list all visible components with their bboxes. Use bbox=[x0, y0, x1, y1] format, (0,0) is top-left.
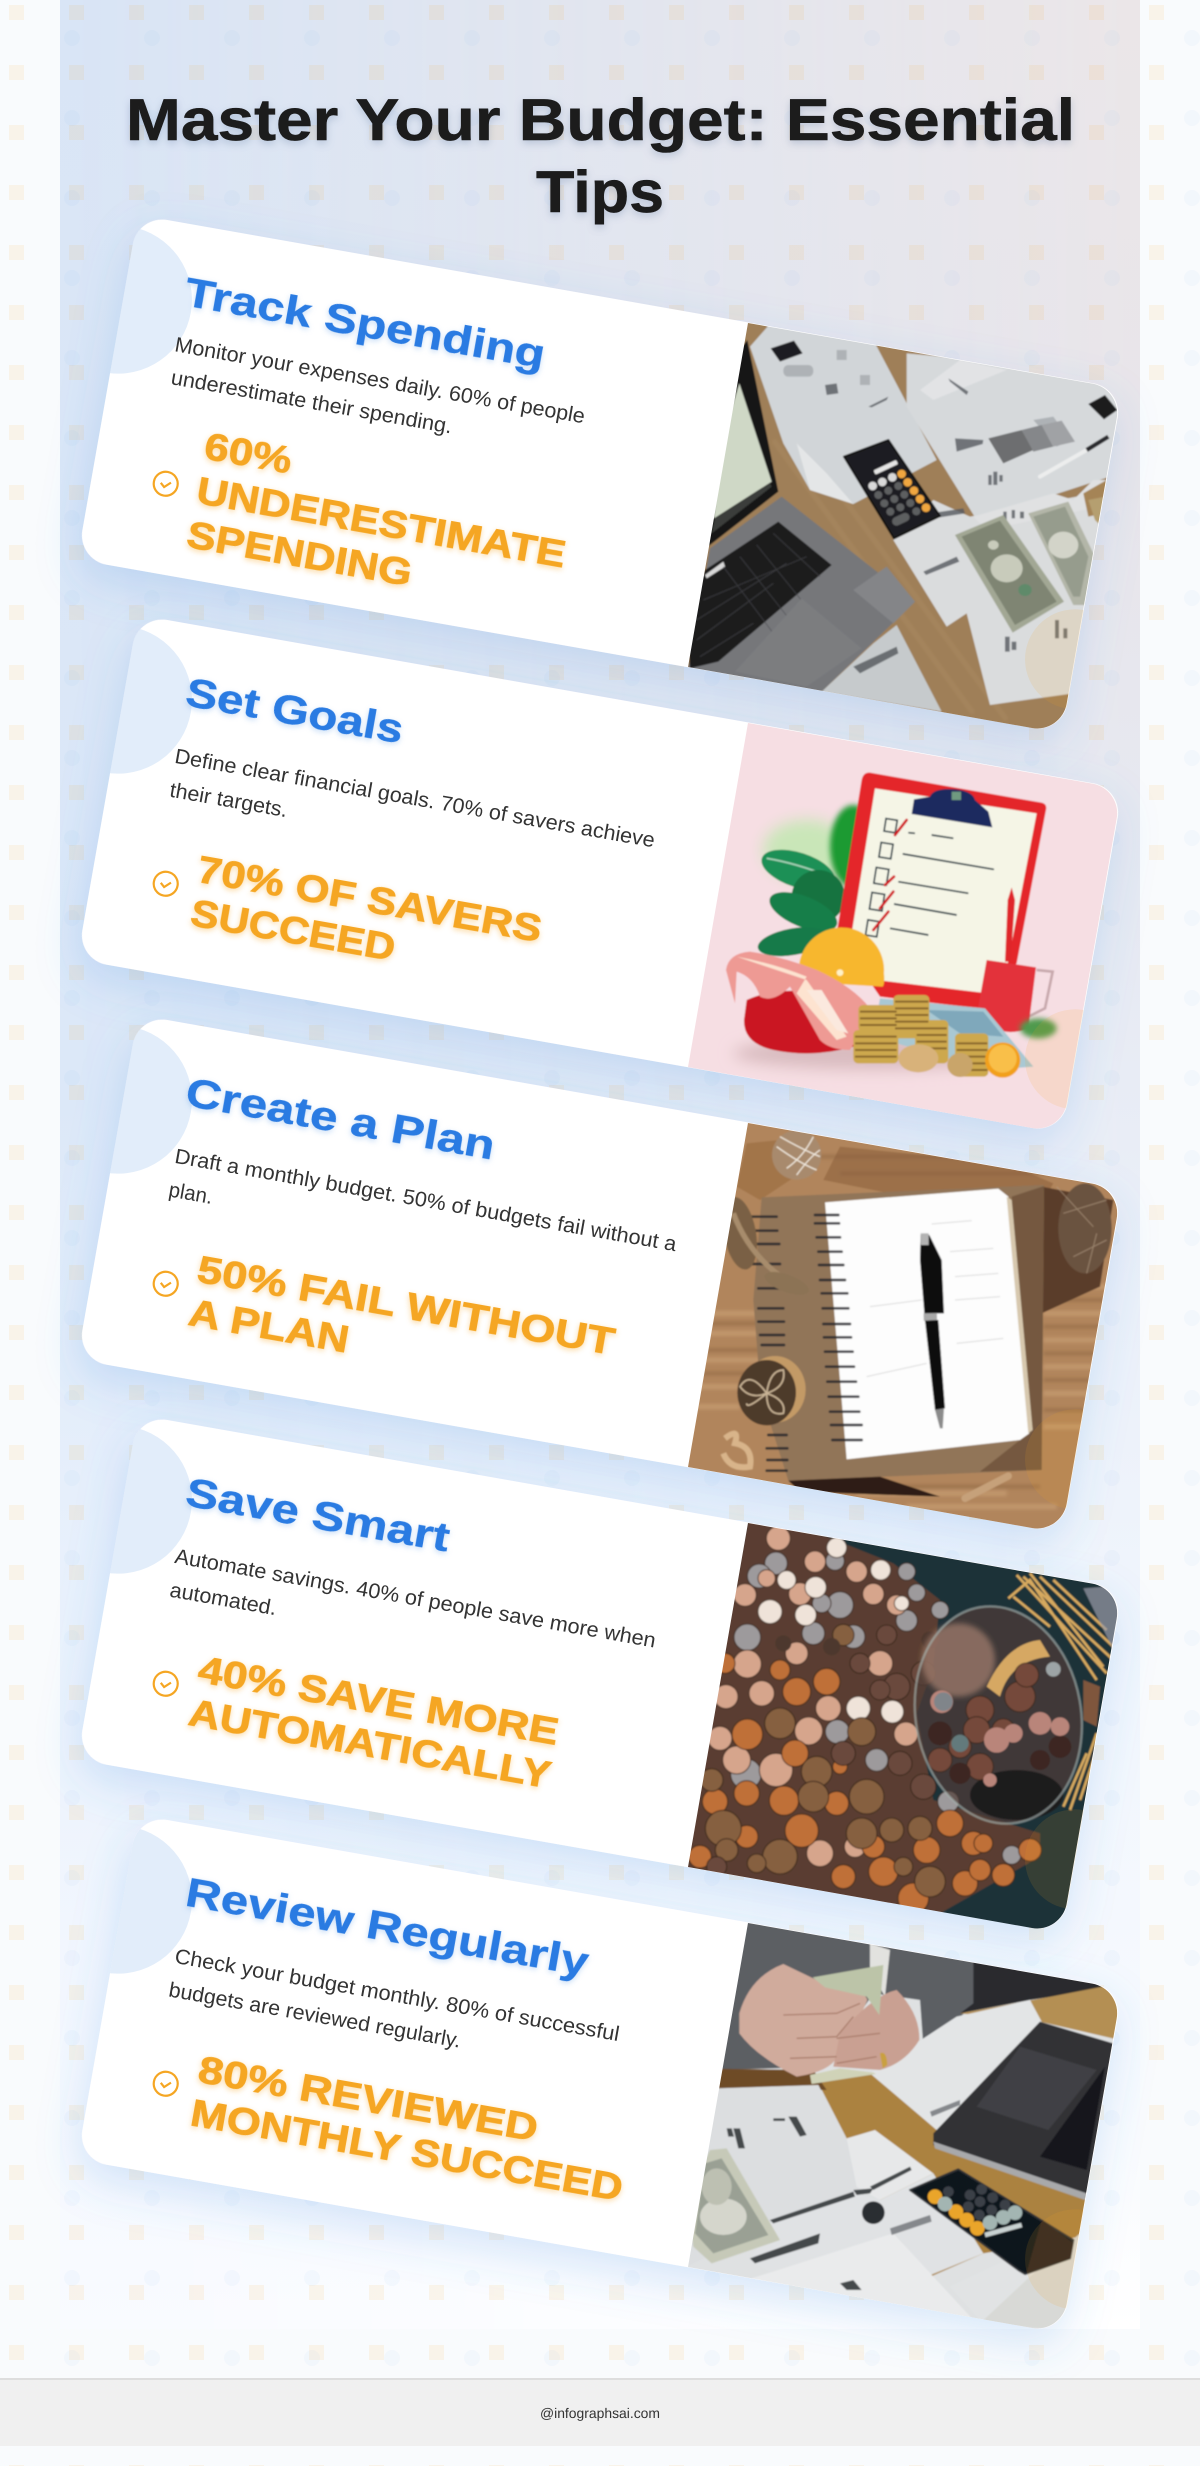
orange slice bbox=[799, 927, 884, 987]
panel: review regularly bbox=[4, 1814, 1170, 2347]
card content: set goals bbox=[4, 614, 1170, 1117]
description bbox=[167, 1945, 621, 2080]
title: Tips bbox=[536, 159, 664, 225]
photo: laptop, calculator and cash on desk bbox=[688, 323, 1117, 728]
bars and marks bbox=[727, 2100, 960, 2290]
heading: Review Regularly bbox=[182, 1869, 593, 1985]
pen bbox=[920, 1235, 944, 1313]
description: Automate savings. 40% of people save more when bbox=[173, 1545, 658, 1652]
pencil bbox=[1005, 887, 1015, 962]
footer bar bbox=[0, 2378, 1200, 2446]
jar glass bbox=[898, 1593, 1099, 1837]
footer credit: @infographsai.com bbox=[540, 2405, 660, 2421]
cash in hand bbox=[813, 1965, 883, 2015]
description: Check your budget monthly. 80% of successful bbox=[173, 1945, 621, 2046]
description: automated. bbox=[168, 1579, 278, 1620]
photo: clipboard checklist, coins and citrus bbox=[688, 723, 1117, 1128]
panel: create a plan bbox=[4, 1014, 1170, 1547]
ribbon bbox=[726, 952, 870, 1050]
pencil stub bbox=[965, 1476, 1008, 1498]
page bbox=[825, 1189, 1029, 1459]
icon: check bbox=[152, 2070, 180, 2098]
red mug bbox=[1028, 970, 1053, 1017]
sweater and dark background bbox=[720, 1917, 977, 2070]
binder clips bbox=[771, 341, 803, 362]
jar coins bbox=[928, 1663, 1039, 1780]
cash stack bbox=[687, 2148, 780, 2263]
card body bbox=[77, 1815, 1123, 2333]
description: budgets are reviewed regularly. bbox=[167, 1979, 463, 2053]
wood areas bbox=[817, 2073, 1087, 2278]
icon: check bbox=[152, 1670, 180, 1698]
description: plan. bbox=[167, 1179, 214, 1209]
card content: create a plan bbox=[4, 1014, 1170, 1517]
pen bbox=[1040, 450, 1087, 477]
coins: brown bbox=[700, 1624, 945, 1897]
description: Draft a monthly budget. 50% of budgets fail without a bbox=[173, 1145, 679, 1256]
panel: set goals bbox=[4, 614, 1170, 1147]
spirals bbox=[749, 1215, 862, 1471]
spaghetti bbox=[1008, 1573, 1113, 1810]
cash stacks bbox=[1028, 502, 1095, 605]
coins: silver bbox=[731, 1552, 1021, 1864]
clipboard bbox=[837, 773, 1046, 1008]
stat: SUCCEED bbox=[187, 892, 399, 970]
laptop bbox=[933, 2022, 1113, 2198]
stat bbox=[185, 1249, 618, 1407]
phone bbox=[910, 2169, 1073, 2274]
phone bbox=[844, 440, 940, 538]
card body bbox=[77, 615, 1123, 1133]
photo: hands counting cash over papers bbox=[673, 1913, 1140, 2347]
photo: spiral notebook and pen on wood bbox=[673, 1113, 1140, 1547]
decorative circles bbox=[4, 1814, 1170, 2317]
coins: pink copper bbox=[708, 1526, 918, 1867]
description: underestimate their spending. bbox=[169, 366, 454, 438]
cash bbox=[873, 998, 1033, 1070]
decorative circles bbox=[110, 229, 1084, 708]
description: Define clear financial goals. 70% of savers achieve bbox=[173, 745, 657, 852]
stat: MONTHLY SUCCEED bbox=[187, 2092, 626, 2210]
stat: UNDERESTIMATE bbox=[193, 470, 569, 576]
jar interior bbox=[898, 1593, 1099, 1837]
description: Monitor your expenses daily. 60% of people bbox=[173, 333, 587, 428]
stat: SPENDING bbox=[184, 514, 415, 595]
stat bbox=[184, 425, 577, 621]
yarn ball bbox=[772, 1130, 821, 1180]
stat: A PLAN bbox=[185, 1292, 352, 1362]
title bbox=[126, 87, 1075, 225]
laptop bbox=[709, 340, 779, 547]
leaves bbox=[760, 848, 835, 888]
stat: 40% SAVE MORE bbox=[195, 1649, 562, 1754]
papers bbox=[870, 2000, 1042, 2130]
small chart marks bbox=[825, 378, 1067, 652]
icon: check bbox=[152, 870, 180, 898]
panel: track spending bbox=[3, 214, 1170, 747]
wood strip under sleeve bbox=[683, 2068, 827, 2090]
icon: check bbox=[152, 1270, 180, 1298]
heading: Save Smart bbox=[182, 1469, 453, 1560]
title: Master Your Budget: Essential bbox=[126, 87, 1075, 153]
photo: coins spilling from a jar bbox=[673, 1513, 1140, 1947]
panel: save smart bbox=[4, 1414, 1170, 1947]
card body bbox=[77, 1015, 1123, 1533]
decorative circles bbox=[4, 1414, 1170, 1917]
card content: save smart bbox=[4, 1414, 1170, 1917]
card content: review regularly bbox=[4, 1814, 1170, 2317]
plant sprig bbox=[1058, 1183, 1112, 1273]
heading: Set Goals bbox=[182, 669, 407, 752]
small orange bbox=[985, 1042, 1020, 1078]
card body bbox=[77, 215, 1123, 733]
stat: AUTOMATICALLY bbox=[185, 1692, 554, 1797]
treemap bbox=[988, 430, 1033, 463]
stat: 70% OF SAVERS bbox=[194, 849, 545, 951]
coins: dark shaded bbox=[707, 1625, 936, 1877]
curled shaving bbox=[723, 1434, 751, 1467]
coins: off-white bbox=[758, 1538, 909, 1723]
decorative circles bbox=[4, 614, 1170, 1117]
card body bbox=[77, 1415, 1123, 1933]
stat bbox=[185, 1649, 562, 1797]
heading: Track Spending bbox=[181, 269, 549, 377]
notebook cover bbox=[753, 1185, 1044, 1481]
stat: 60% bbox=[201, 426, 295, 482]
coin stacks bbox=[853, 995, 988, 1077]
coins: bright copper bbox=[689, 1653, 1041, 1914]
icon: check bbox=[152, 470, 180, 498]
stat bbox=[186, 849, 545, 994]
stat: 50% FAIL WITHOUT bbox=[194, 1249, 618, 1364]
stat bbox=[187, 2049, 634, 2210]
red bowl bbox=[744, 991, 860, 1053]
hands bbox=[739, 1964, 867, 2077]
stat: 80% REVIEWED bbox=[195, 2049, 541, 2150]
seed pod bbox=[744, 1356, 806, 1423]
description: their targets. bbox=[168, 779, 289, 822]
card content: track spending bbox=[110, 229, 1084, 708]
heading: Create a Plan bbox=[182, 1069, 499, 1168]
plant twigs left bbox=[718, 1194, 762, 1272]
decorative circles bbox=[4, 1014, 1170, 1517]
